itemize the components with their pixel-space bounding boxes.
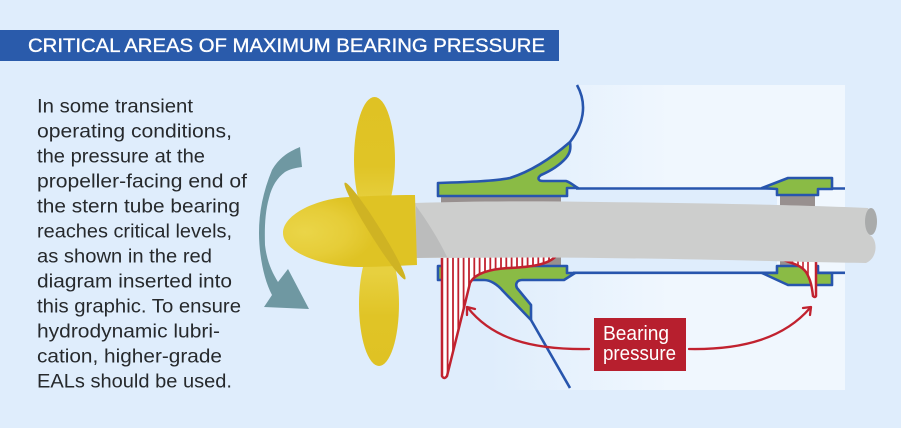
- tube line, upper: [576, 187, 845, 190]
- aft casting, lower: [762, 266, 832, 285]
- aft casting, upper: [762, 178, 832, 195]
- blade root disc: [340, 180, 410, 282]
- body text: hydrodynamic lubri-: [37, 320, 220, 342]
- upper blade: [354, 97, 395, 223]
- hub: [283, 195, 417, 267]
- red pressure diagram, aft bearing: [783, 261, 818, 298]
- bearing pads: [441, 195, 815, 267]
- tube line, lower: [573, 271, 845, 274]
- propeller: [283, 97, 417, 366]
- title banner: CRITICAL AREAS OF MAXIMUM BEARING PRESSURE: [28, 36, 545, 57]
- body text: reaches critical levels,: [37, 220, 232, 242]
- lower blade: [359, 242, 399, 366]
- body text: In some transient: [37, 96, 194, 118]
- hull casting, upper: [438, 85, 845, 196]
- callout arrow to stern tube diagram: [467, 307, 589, 349]
- hull interior panel: [490, 85, 845, 390]
- callout: bearing pressure: [594, 318, 686, 371]
- callout: bearing pressure: pressure: [603, 343, 676, 365]
- body text: [37, 96, 248, 392]
- body text: EALs should be used.: [37, 370, 232, 392]
- body text: operating conditions,: [37, 121, 232, 143]
- aft bearing pad, upper: [780, 195, 815, 207]
- body text: cation, higher-grade: [37, 345, 222, 367]
- aft bearing pad, lower: [780, 258, 815, 267]
- hull line, lower: [531, 320, 570, 388]
- body text: the stern tube bearing: [37, 196, 240, 218]
- hull casting, lower: [438, 266, 845, 388]
- red pressure diagram, stern tube bearing: [442, 256, 556, 380]
- shaft end face: [865, 208, 877, 235]
- callout arrow to aft bearing diagram: [689, 307, 811, 349]
- stern tube bearing pad, upper: [441, 195, 561, 204]
- rotation arrow: [259, 147, 309, 309]
- callout: bearing pressure: Bearing: [603, 323, 669, 345]
- body text: this graphic. To ensure: [37, 295, 241, 317]
- body text: propeller-facing end of: [37, 171, 248, 193]
- title banner: [0, 30, 559, 61]
- shaft: [414, 201, 877, 263]
- body text: as shown in the red: [37, 246, 212, 268]
- body text: the pressure at the: [37, 146, 205, 168]
- hull line, upper: [570, 85, 583, 142]
- hub shadow on shaft: [416, 206, 447, 258]
- stern tube bearing pad, lower: [441, 256, 561, 267]
- upper casting body: [438, 142, 578, 196]
- body text: diagram inserted into: [37, 270, 232, 292]
- lower casting body: [438, 266, 575, 320]
- stern tube bore: [436, 190, 777, 272]
